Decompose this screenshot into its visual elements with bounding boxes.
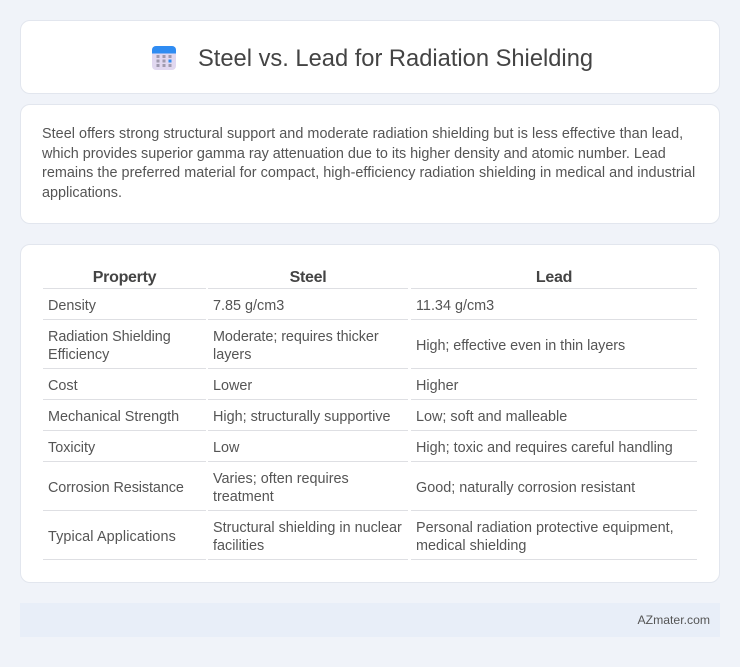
footer bar bbox=[20, 603, 720, 637]
row: typical applications: Personal radiation protective equipment, bbox=[416, 520, 674, 536]
row: corrosion resistance: treatment bbox=[213, 489, 274, 505]
title card bbox=[20, 20, 720, 94]
row: radiation shielding efficiency: High; effective even in thin layers bbox=[416, 338, 625, 354]
row: toxicity: High; toxic and requires careful handling bbox=[416, 440, 673, 456]
row: corrosion resistance: Varies; often requires bbox=[213, 471, 349, 487]
row: toxicity bbox=[48, 440, 673, 456]
intro text bbox=[42, 126, 695, 201]
icon: calendar bbox=[152, 46, 176, 70]
intro text: Steel offers strong structural support and moderate radiation shielding but is less effective than lead, bbox=[42, 126, 683, 142]
row: toxicity: Low bbox=[213, 440, 239, 456]
row: radiation shielding efficiency: layers bbox=[213, 347, 251, 363]
row: cost: Cost bbox=[48, 378, 78, 394]
header row: Steel bbox=[290, 269, 326, 286]
intro text: which provides superior gamma ray attenuation due to its higher density and atomic number. Lead bbox=[42, 146, 666, 162]
header row: Lead bbox=[536, 269, 572, 286]
row: radiation shielding efficiency: Efficiency bbox=[48, 347, 109, 363]
header row: Property bbox=[93, 269, 156, 286]
row: corrosion resistance: Corrosion Resistance bbox=[48, 480, 184, 496]
row: density bbox=[48, 298, 494, 314]
row: radiation shielding efficiency: Moderate; requires thicker bbox=[213, 329, 379, 345]
row: cost: Lower bbox=[213, 378, 252, 394]
table card bbox=[20, 244, 720, 583]
row: mechanical strength: High; structurally supportive bbox=[213, 409, 391, 425]
row: typical applications: Structural shielding in nuclear bbox=[213, 520, 402, 536]
row: cost: Higher bbox=[416, 378, 458, 394]
row: typical applications: Typical Applications bbox=[48, 529, 176, 545]
header row bbox=[93, 269, 572, 286]
row: typical applications: facilities bbox=[213, 538, 264, 554]
row: typical applications: medical shielding bbox=[416, 538, 526, 554]
row: mechanical strength: Low; soft and malleable bbox=[416, 409, 567, 425]
row: mechanical strength bbox=[48, 409, 567, 425]
intro text: remains the preferred material for compact, high-efficiency radiation shielding in medical and industrial bbox=[42, 165, 695, 181]
comparison table bbox=[43, 269, 697, 560]
row: corrosion resistance: Good; naturally corrosion resistant bbox=[416, 480, 635, 496]
row: typical applications bbox=[48, 520, 674, 554]
intro text: applications. bbox=[42, 185, 122, 201]
row: radiation shielding efficiency bbox=[48, 329, 625, 363]
row: cost bbox=[48, 378, 458, 394]
footer text: AZmater.com bbox=[638, 613, 710, 627]
row: toxicity: Toxicity bbox=[48, 440, 95, 456]
row: mechanical strength: Mechanical Strength bbox=[48, 409, 179, 425]
row: density: Density bbox=[48, 298, 96, 314]
title: Steel vs. Lead for Radiation Shielding bbox=[198, 46, 593, 72]
row: radiation shielding efficiency: Radiation Shielding bbox=[48, 329, 171, 345]
row: density: 11.34 g/cm3 bbox=[416, 298, 494, 314]
row: corrosion resistance bbox=[48, 471, 636, 505]
row: density: 7.85 g/cm3 bbox=[213, 298, 284, 314]
intro card bbox=[20, 104, 720, 224]
